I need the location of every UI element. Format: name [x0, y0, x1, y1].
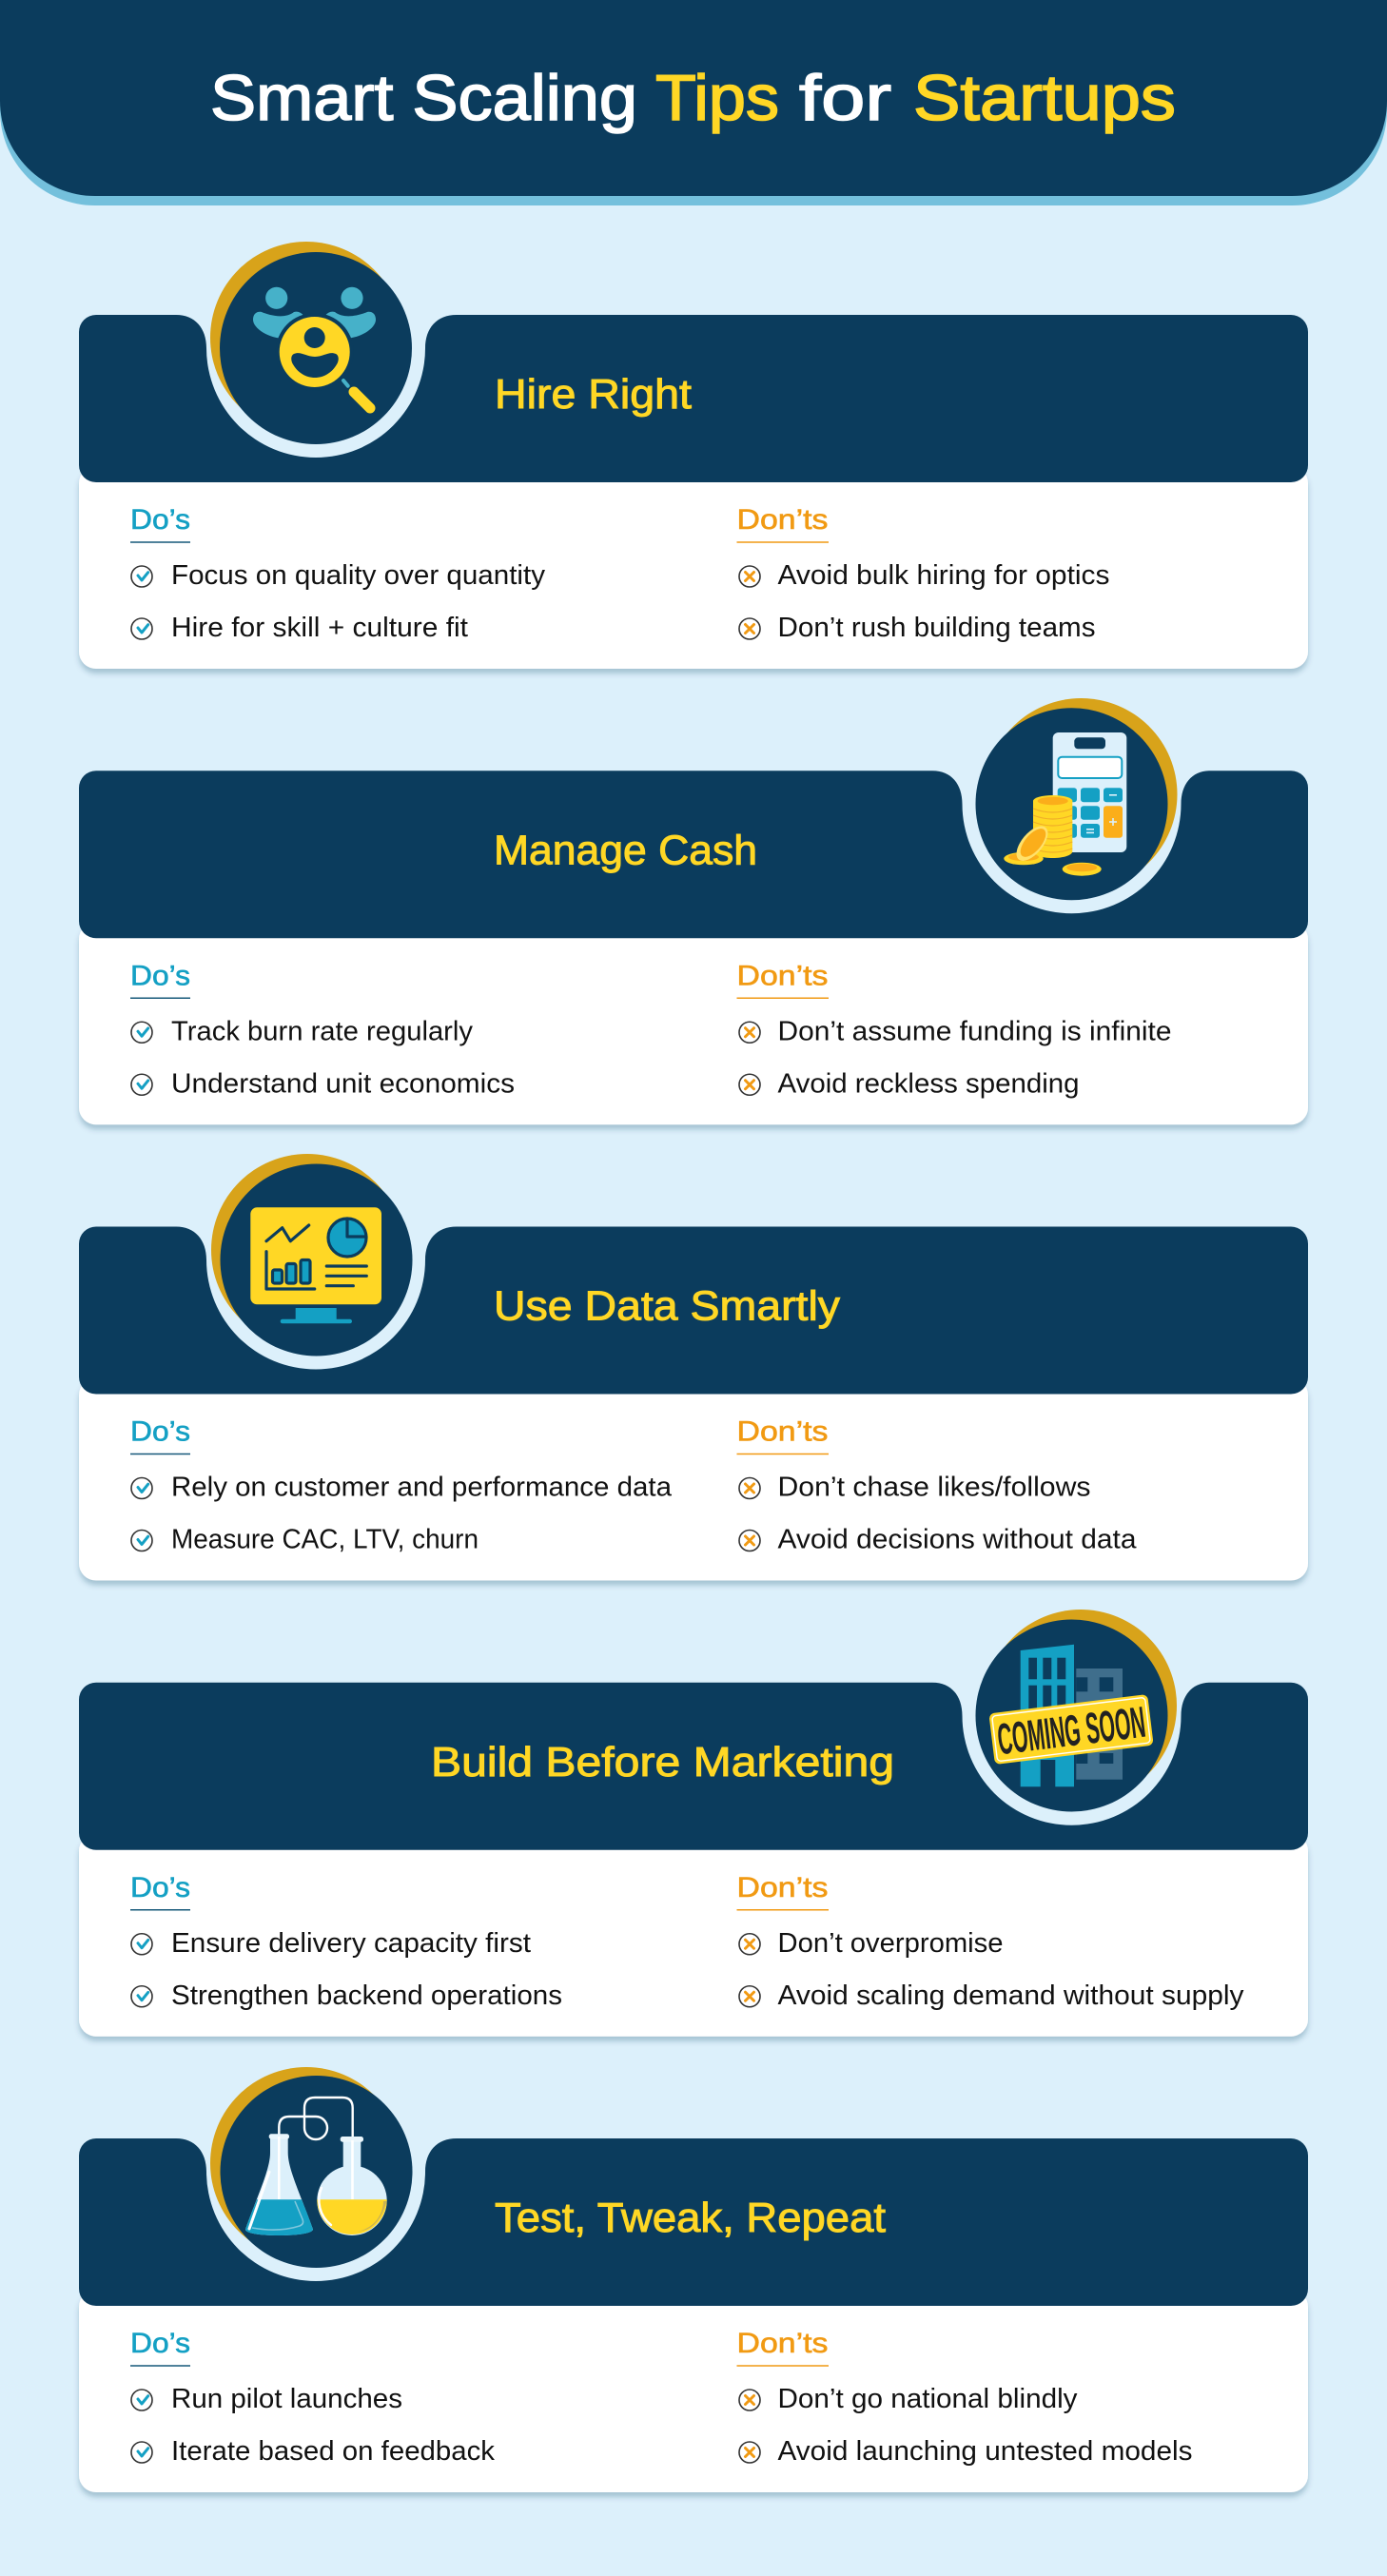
do's column: Do’s	[130, 960, 190, 991]
don'ts column	[736, 1415, 1137, 1554]
panel body	[79, 2290, 1308, 2492]
don'ts column: Don’t rush building teams	[778, 613, 1096, 643]
do's column	[130, 1415, 673, 1554]
don'ts column	[736, 504, 1109, 643]
don'ts column	[736, 960, 1172, 1099]
do's column: Do’s	[130, 2328, 190, 2359]
icon: calculator and coins	[976, 698, 1178, 900]
do's column: Ensure delivery capacity first	[171, 1928, 531, 1959]
panel: Use Data Smartly	[79, 1154, 1308, 1581]
don'ts column: Don’t assume funding is infinite	[778, 1016, 1172, 1046]
don'ts column: Don’ts	[736, 1415, 828, 1448]
don'ts column: Avoid launching untested models	[778, 2436, 1193, 2467]
do's column: Do’s	[130, 1415, 190, 1448]
panel header	[79, 315, 1308, 482]
panel body	[79, 466, 1308, 669]
do's column: Track burn rate regularly	[171, 1016, 473, 1046]
title: for	[799, 62, 891, 134]
don'ts column: Don’ts	[736, 2328, 828, 2359]
don'ts column: Don’t go national blindly	[778, 2384, 1078, 2414]
don'ts column: Don’ts	[736, 960, 828, 991]
don'ts column: Don’t chase likes/follows	[778, 1473, 1090, 1503]
don'ts column: Avoid bulk hiring for optics	[778, 560, 1109, 591]
panel header	[79, 771, 1308, 938]
icon: hiring search	[210, 242, 412, 444]
do's column: Hire for skill + culture fit	[171, 613, 468, 643]
panel body	[79, 1377, 1308, 1581]
icon: coming soon building	[976, 1610, 1177, 1811]
icon: lab flasks	[210, 2067, 413, 2268]
do's column: Do’s	[130, 504, 190, 536]
panel header	[79, 2138, 1308, 2306]
panel heading: Test, Tweak, Repeat	[495, 2195, 886, 2241]
do's column: Rely on customer and performance data	[171, 1473, 673, 1503]
do's column	[130, 1872, 562, 2011]
do's column	[130, 504, 545, 643]
do's column: Iterate based on feedback	[171, 2436, 496, 2467]
do's column: Strengthen backend operations	[171, 1981, 562, 2011]
panel heading: Hire Right	[495, 371, 692, 418]
title	[210, 62, 1176, 134]
don'ts column: Don’t overpromise	[778, 1928, 1003, 1959]
panel: Build Before Marketing	[79, 1610, 1308, 2037]
don'ts column: Avoid reckless spending	[778, 1068, 1079, 1099]
title: Tips	[655, 62, 779, 134]
panel body	[79, 922, 1308, 1124]
icon: data dashboard monitor	[211, 1154, 413, 1356]
icon: coming soon building: COMING SOON	[995, 1697, 1148, 1764]
do's column: Run pilot launches	[171, 2384, 402, 2414]
panel header	[79, 1227, 1308, 1395]
do's column: Focus on quality over quantity	[171, 560, 545, 591]
don'ts column: Don’ts	[736, 1872, 828, 1903]
do's column: Measure CAC, LTV, churn	[171, 1524, 479, 1554]
don'ts column	[736, 1872, 1244, 2011]
do's column: Understand unit economics	[171, 1068, 515, 1099]
top banner	[0, 0, 1387, 205]
title: Startups	[913, 62, 1176, 134]
don'ts column: Avoid decisions without data	[778, 1524, 1137, 1554]
panel heading: Use Data Smartly	[494, 1282, 840, 1330]
do's column	[130, 2328, 496, 2467]
panel body	[79, 1834, 1308, 2037]
panel: Hire Right	[79, 242, 1308, 669]
panel heading: Manage Cash	[494, 827, 757, 873]
title: Smart Scaling	[210, 62, 637, 134]
panel heading: Build Before Marketing	[431, 1739, 894, 1786]
do's column	[130, 960, 515, 1099]
panel: Manage Cash	[79, 698, 1308, 1124]
don'ts column: Don’ts	[736, 504, 828, 536]
do's column: Do’s	[130, 1872, 190, 1903]
don'ts column: Avoid scaling demand without supply	[778, 1981, 1244, 2011]
panel: Test, Tweak, Repeat	[79, 2067, 1308, 2492]
panel header	[79, 1683, 1308, 1850]
don'ts column	[736, 2328, 1193, 2467]
